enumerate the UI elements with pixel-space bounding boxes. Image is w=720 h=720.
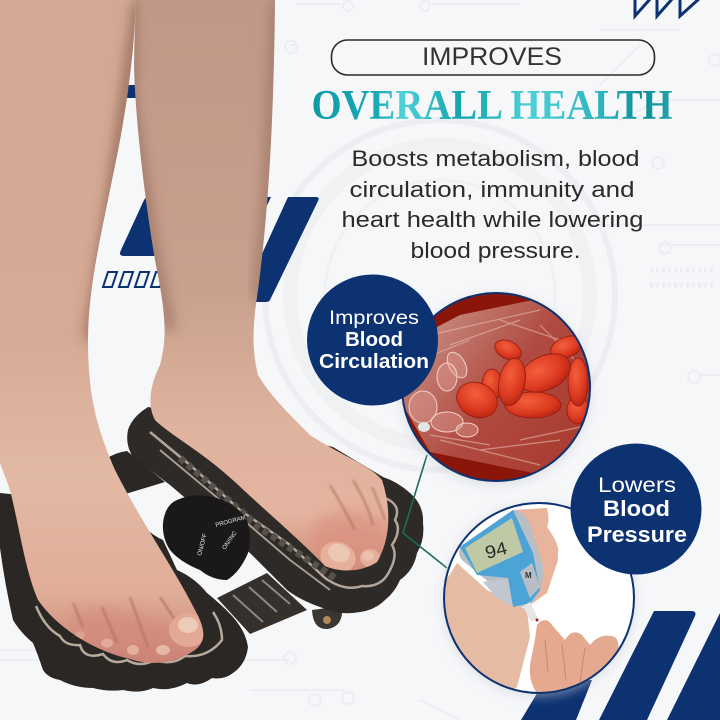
photo: massage mat with feet xyxy=(0,0,423,692)
test strip xyxy=(523,602,538,622)
callout: improves blood circulation: Improves xyxy=(329,307,419,329)
callout: lowers blood pressure: Pressure xyxy=(587,522,687,547)
small parallelogram row xyxy=(103,272,165,287)
description text: Boosts metabolism, blood xyxy=(352,146,640,171)
meter body xyxy=(460,510,540,607)
callout: lowers blood pressure: Lowers xyxy=(598,474,676,497)
control unit: ON/OFF xyxy=(197,533,209,557)
description text: circulation, immunity and xyxy=(350,177,634,202)
meter arrow panel xyxy=(483,578,513,607)
photo: red blood cells xyxy=(400,290,600,486)
callout: lowers blood pressure xyxy=(570,444,702,574)
connector ribs xyxy=(233,580,290,622)
right mat pad xyxy=(127,407,423,613)
right mat inner line xyxy=(160,450,330,590)
title line: improves: IMPROVES xyxy=(422,43,562,71)
meter reading: 94 xyxy=(483,538,509,563)
meter rim xyxy=(459,510,543,607)
description text: heart health while lowering xyxy=(342,207,644,232)
right mat pattern xyxy=(150,432,398,588)
decorative navy stripes behind legs xyxy=(120,85,319,302)
bottom right navy stripes xyxy=(521,611,720,720)
left leg and foot xyxy=(0,0,220,672)
pricked hand xyxy=(530,620,618,697)
control unit: PROGRAM xyxy=(215,515,246,529)
meter M button: M xyxy=(525,571,532,580)
control unit xyxy=(163,495,250,580)
top right chevrons xyxy=(635,0,700,16)
callout: improves blood circulation: Circulation xyxy=(319,351,429,373)
description text: blood pressure. xyxy=(410,238,580,263)
mat grid dots xyxy=(180,458,335,578)
photo: glucose meter xyxy=(435,503,636,700)
callout: lowers blood pressure: Blood xyxy=(603,496,670,521)
left mat pad xyxy=(0,493,248,692)
loop ring xyxy=(312,606,342,629)
description text xyxy=(342,146,644,263)
callout: improves blood circulation xyxy=(307,274,438,406)
lower mat connector xyxy=(217,573,307,634)
callout: improves blood circulation: Blood xyxy=(345,329,403,351)
right leg and foot xyxy=(134,0,388,570)
supporting hand xyxy=(445,563,530,689)
hand behind meter xyxy=(513,508,558,603)
left mat pattern xyxy=(36,606,222,664)
artery wall xyxy=(400,300,600,473)
red cells xyxy=(451,332,589,424)
heading: overall health: OVERALL HEALTH xyxy=(312,83,672,129)
meter screen xyxy=(465,518,523,573)
translucent cells xyxy=(409,349,478,437)
title pill xyxy=(332,40,654,75)
meter M button xyxy=(520,563,540,598)
control unit: ON/INC xyxy=(222,530,239,551)
upper mat connector xyxy=(107,451,165,495)
connector lines xyxy=(403,455,447,568)
